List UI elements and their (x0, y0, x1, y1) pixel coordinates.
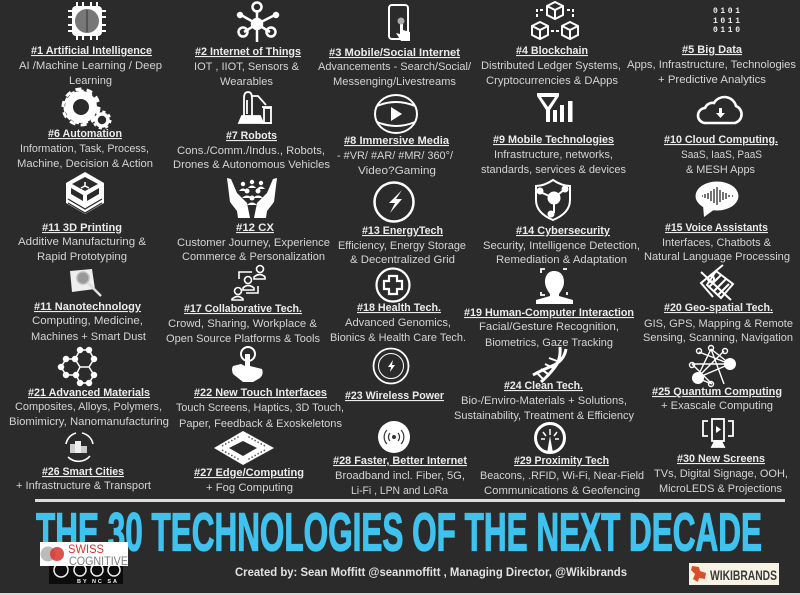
description: Cons./Comm./Indus., Robots, (177, 145, 325, 157)
item 6: Automation (17, 89, 153, 170)
logo: Swiss Cognitive (40, 542, 128, 568)
description: + Exascale Computing (661, 400, 773, 412)
item 27: Edge/Computing (194, 431, 304, 494)
description: SaaS, IaaS, PaaS (681, 149, 762, 161)
heading: #24 Clean Tech. (504, 380, 583, 392)
description: Wearables (220, 76, 273, 88)
heading: #14 Cybersecurity (516, 225, 611, 237)
icon: binary digits: 0101 (713, 7, 740, 16)
logo: Wikibrands: WIKIBRANDS (710, 567, 777, 583)
description: Facial/Gesture Recognition, (479, 321, 619, 333)
description (644, 237, 790, 263)
heading: #15 Voice Assistants (665, 222, 768, 234)
description (318, 61, 472, 88)
description (173, 145, 331, 171)
icon: quantum network (690, 346, 736, 386)
item 4: Blockchain (481, 2, 621, 87)
description: + Infrastructure & Transport (16, 480, 151, 492)
description: Cryptocurrencies & DApps (486, 75, 619, 87)
heading: #8 Immersive Media (344, 135, 450, 147)
description: Advancements - Search/Social/ (318, 61, 472, 73)
icon: satellite (701, 265, 733, 300)
description: IOT , IIOT, Sensors & (194, 61, 300, 73)
description: Machines + Smart Dust (31, 331, 146, 343)
item 18: Health Tech (330, 268, 466, 344)
icon: touching hand (232, 347, 263, 382)
item 13: EnergyTech (338, 182, 466, 266)
heading: #10 Cloud Computing. (664, 134, 778, 146)
heading: #4 Blockchain (516, 45, 588, 57)
item 12: CX (177, 178, 330, 263)
credit line: Created by: Sean Moffitt @seanmoffitt , Managing Director, @Wikibrands (235, 565, 627, 579)
heading: #1 Artificial Intelligence (31, 45, 152, 57)
heading: #29 Proximity Tech (514, 455, 609, 467)
heading: #3 Mobile/Social Internet (329, 47, 460, 59)
logo: Swiss Cognitive: SWISS (68, 544, 104, 556)
description: Infrastructure, networks, (494, 149, 613, 161)
icon: AI chip brain (68, 2, 106, 40)
description: Crowd, Sharing, Workplace & (168, 318, 318, 330)
heading: #28 Faster, Better Internet (333, 455, 467, 467)
icon: linked cubes (532, 2, 578, 39)
description: Touch Screens, Haptics, 3D Touch, (176, 402, 344, 414)
description (17, 143, 153, 170)
description (654, 468, 788, 495)
icon: city with cycle arrows (66, 433, 93, 461)
icon: binary digits: 0110 (713, 26, 740, 35)
heading: #11 3D Printing (42, 222, 122, 234)
description: + Predictive Analytics (658, 74, 767, 86)
item 23: Wireless Power (345, 348, 445, 402)
heading: #20 Geo-spatial Tech. (664, 302, 773, 314)
description: Bionics & Health Care Tech. (330, 332, 466, 344)
icon: cloud download (698, 97, 742, 123)
description (481, 149, 626, 176)
item 25: Quantum Computing (652, 346, 782, 412)
icon: antenna and signal bars (537, 93, 572, 122)
heading: #5 Big Data (682, 44, 743, 56)
description: Open Source Platforms & Tools (166, 333, 320, 345)
description: Interfaces, Chatbots & (662, 237, 772, 249)
description: Paper, Feedback & Exoskeletons (179, 418, 342, 430)
item 15: Voice Assistants (644, 182, 790, 263)
description: Sustainability, Treatment & Efficiency (454, 410, 635, 422)
icon: robot arm (239, 92, 272, 123)
icon: 3D printed cube (66, 172, 104, 214)
item 29: Proximity Tech (480, 424, 644, 497)
item 5: Big Data (627, 7, 796, 86)
description (481, 60, 621, 87)
description: Additive Manufacturing & (18, 236, 147, 248)
heading: #6 Automation (48, 128, 122, 140)
heading: #2 Internet of Things (195, 46, 301, 58)
item 8: Immersive Media (337, 95, 454, 177)
description (166, 318, 320, 345)
icon: lightning bolt circle (374, 182, 414, 222)
heading: #23 Wireless Power (345, 390, 445, 402)
description (338, 240, 466, 266)
icon: voice speech bubble (696, 182, 738, 217)
item 11: 3D Printing (18, 172, 147, 263)
description (479, 321, 619, 349)
description (177, 237, 330, 263)
description (194, 61, 300, 88)
icon: connected nodes (238, 2, 278, 42)
icon: wireless power rings (374, 348, 408, 384)
item 21: Advanced Materials (9, 348, 169, 428)
description: Customer Journey, Experience (177, 237, 330, 249)
description: TVs, Digital Signage, OOH, (654, 468, 788, 480)
item 19: Human-Computer Interaction (464, 269, 634, 349)
icon: binary digits: 1011 (713, 17, 740, 26)
icon: signal circle (378, 421, 410, 453)
description: Biometrics, Gaze Tracking (485, 337, 613, 349)
logo: Swiss Cognitive: COGNITIVE (69, 554, 128, 568)
description: Efficiency, Energy Storage (338, 240, 466, 252)
description: Bio-/Enviro-Materials + Solutions, (461, 395, 627, 407)
description: Drones & Autonomous Vehicles (173, 159, 331, 171)
description: & Decentralized Grid (350, 254, 455, 266)
description: Communications & Geofencing (484, 485, 640, 497)
icon: DNA helix (533, 347, 566, 382)
item 14: Cybersecurity (483, 180, 640, 266)
item 10: Cloud Computing (664, 97, 778, 176)
heading: #19 Human-Computer Interaction (464, 307, 634, 319)
icon: face scan bust (536, 269, 573, 304)
description: Composites, Alloys, Polymers, (15, 401, 162, 413)
description: GIS, GPS, Mapping & Remote (644, 318, 793, 330)
item 17: Collaborative Tech (166, 266, 320, 345)
description: AI /Machine Learning / Deep (19, 60, 162, 72)
item 22: New Touch Interfaces (176, 347, 344, 430)
description: Beacons, .RFID, Wi-Fi, Near-Field (480, 470, 644, 482)
heading: #12 CX (236, 222, 275, 234)
icon: binary digits (713, 7, 740, 35)
item 26: Smart Cities (16, 433, 151, 492)
logo: Wikibrands (689, 563, 779, 585)
icon: phone with hand (389, 5, 410, 41)
description: Commerce & Personalization (182, 251, 325, 263)
heading: #7 Robots (226, 130, 277, 142)
description: + Fog Computing (206, 482, 293, 494)
description (483, 240, 640, 266)
description (19, 60, 162, 87)
badge: creative commons licence: BY NC SA (77, 579, 117, 585)
description (330, 317, 466, 344)
icon: shield with network (536, 180, 570, 220)
heading: #22 New Touch Interfaces (194, 387, 327, 399)
icon: medical cross circle (376, 268, 410, 302)
heading: #21 Advanced Materials (28, 387, 150, 399)
description: Machine, Decision & Action (17, 158, 153, 170)
description (9, 401, 169, 428)
badge: creative commons licence (49, 562, 123, 585)
heading: #13 EnergyTech (362, 225, 443, 237)
icon: digital screens (703, 419, 733, 447)
description (480, 470, 644, 497)
icon: isometric chip (214, 431, 274, 465)
description: Rapid Prototyping (37, 251, 127, 263)
description: Security, Intelligence Detection, (483, 240, 640, 252)
description: Information, Task, Process, (20, 143, 149, 155)
heading: #9 Mobile Technologies (493, 134, 614, 146)
description: Messenging/Livestreams (333, 76, 456, 88)
description: Advanced Genomics, (345, 317, 451, 329)
heading: #11 Nanotechnology (34, 301, 142, 313)
description: Sensing, Scanning, Navigation (643, 332, 793, 344)
item 2: Internet of Things (194, 2, 301, 88)
heading: #30 New Screens (677, 453, 765, 465)
description (31, 315, 146, 343)
description: MicroLEDS & Projections (659, 483, 782, 495)
item 20: Geo-spatial Tech (643, 265, 793, 344)
description: & MESH Apps (686, 164, 755, 176)
description: Broadband incl. Fiber, 5G, (335, 470, 465, 482)
description (335, 470, 465, 497)
description: Natural Language Processing (644, 251, 790, 263)
description: Biomimicry, Nanomanufacturing (9, 416, 169, 428)
description: Learning (69, 75, 112, 87)
description: standards, services & devices (481, 164, 626, 176)
item 3: Mobile/Social Internet (318, 5, 472, 88)
description: Distributed Ledger Systems, (481, 60, 621, 72)
description: - #VR/ #AR/ #MR/ 360°/ (337, 150, 454, 162)
icon: hands holding people (227, 178, 277, 218)
heading: #18 Health Tech. (357, 302, 441, 314)
icon: magnifier over sheet (70, 269, 101, 296)
description (627, 59, 796, 86)
description (176, 402, 344, 430)
description: Li-Fi , LPN and LoRa (351, 485, 449, 497)
item 24: Clean Tech (454, 347, 635, 422)
description (18, 236, 147, 263)
description: Computing, Medicine, (32, 315, 143, 327)
description (643, 318, 793, 344)
description (337, 150, 454, 177)
heading: #27 Edge/Computing (194, 467, 304, 479)
description: Video?Gaming (358, 165, 436, 177)
icon: people with arrows (232, 266, 265, 300)
heading: #17 Collaborative Tech. (184, 303, 302, 315)
description: Apps, Infrastructure, Technologies (627, 59, 796, 71)
item 16: Nanotechnology (31, 269, 146, 343)
icon: VR sphere with play (375, 95, 417, 133)
heading: #25 Quantum Computing (652, 386, 782, 398)
item 1: Artificial Intelligence (19, 2, 162, 87)
item 28: Faster, Better Internet (333, 421, 467, 497)
heading: #26 Smart Cities (42, 466, 124, 478)
item 9: Mobile Technologies (481, 93, 626, 176)
icon: proximity beacon circle (536, 424, 564, 453)
item 7: Robots (173, 92, 331, 171)
description: Remediation & Adaptation (496, 254, 627, 266)
description (454, 395, 635, 422)
icon: gears (63, 89, 110, 128)
icon: molecule hexagons (58, 348, 96, 386)
description (681, 149, 762, 176)
item 30: New Screens (654, 419, 788, 495)
